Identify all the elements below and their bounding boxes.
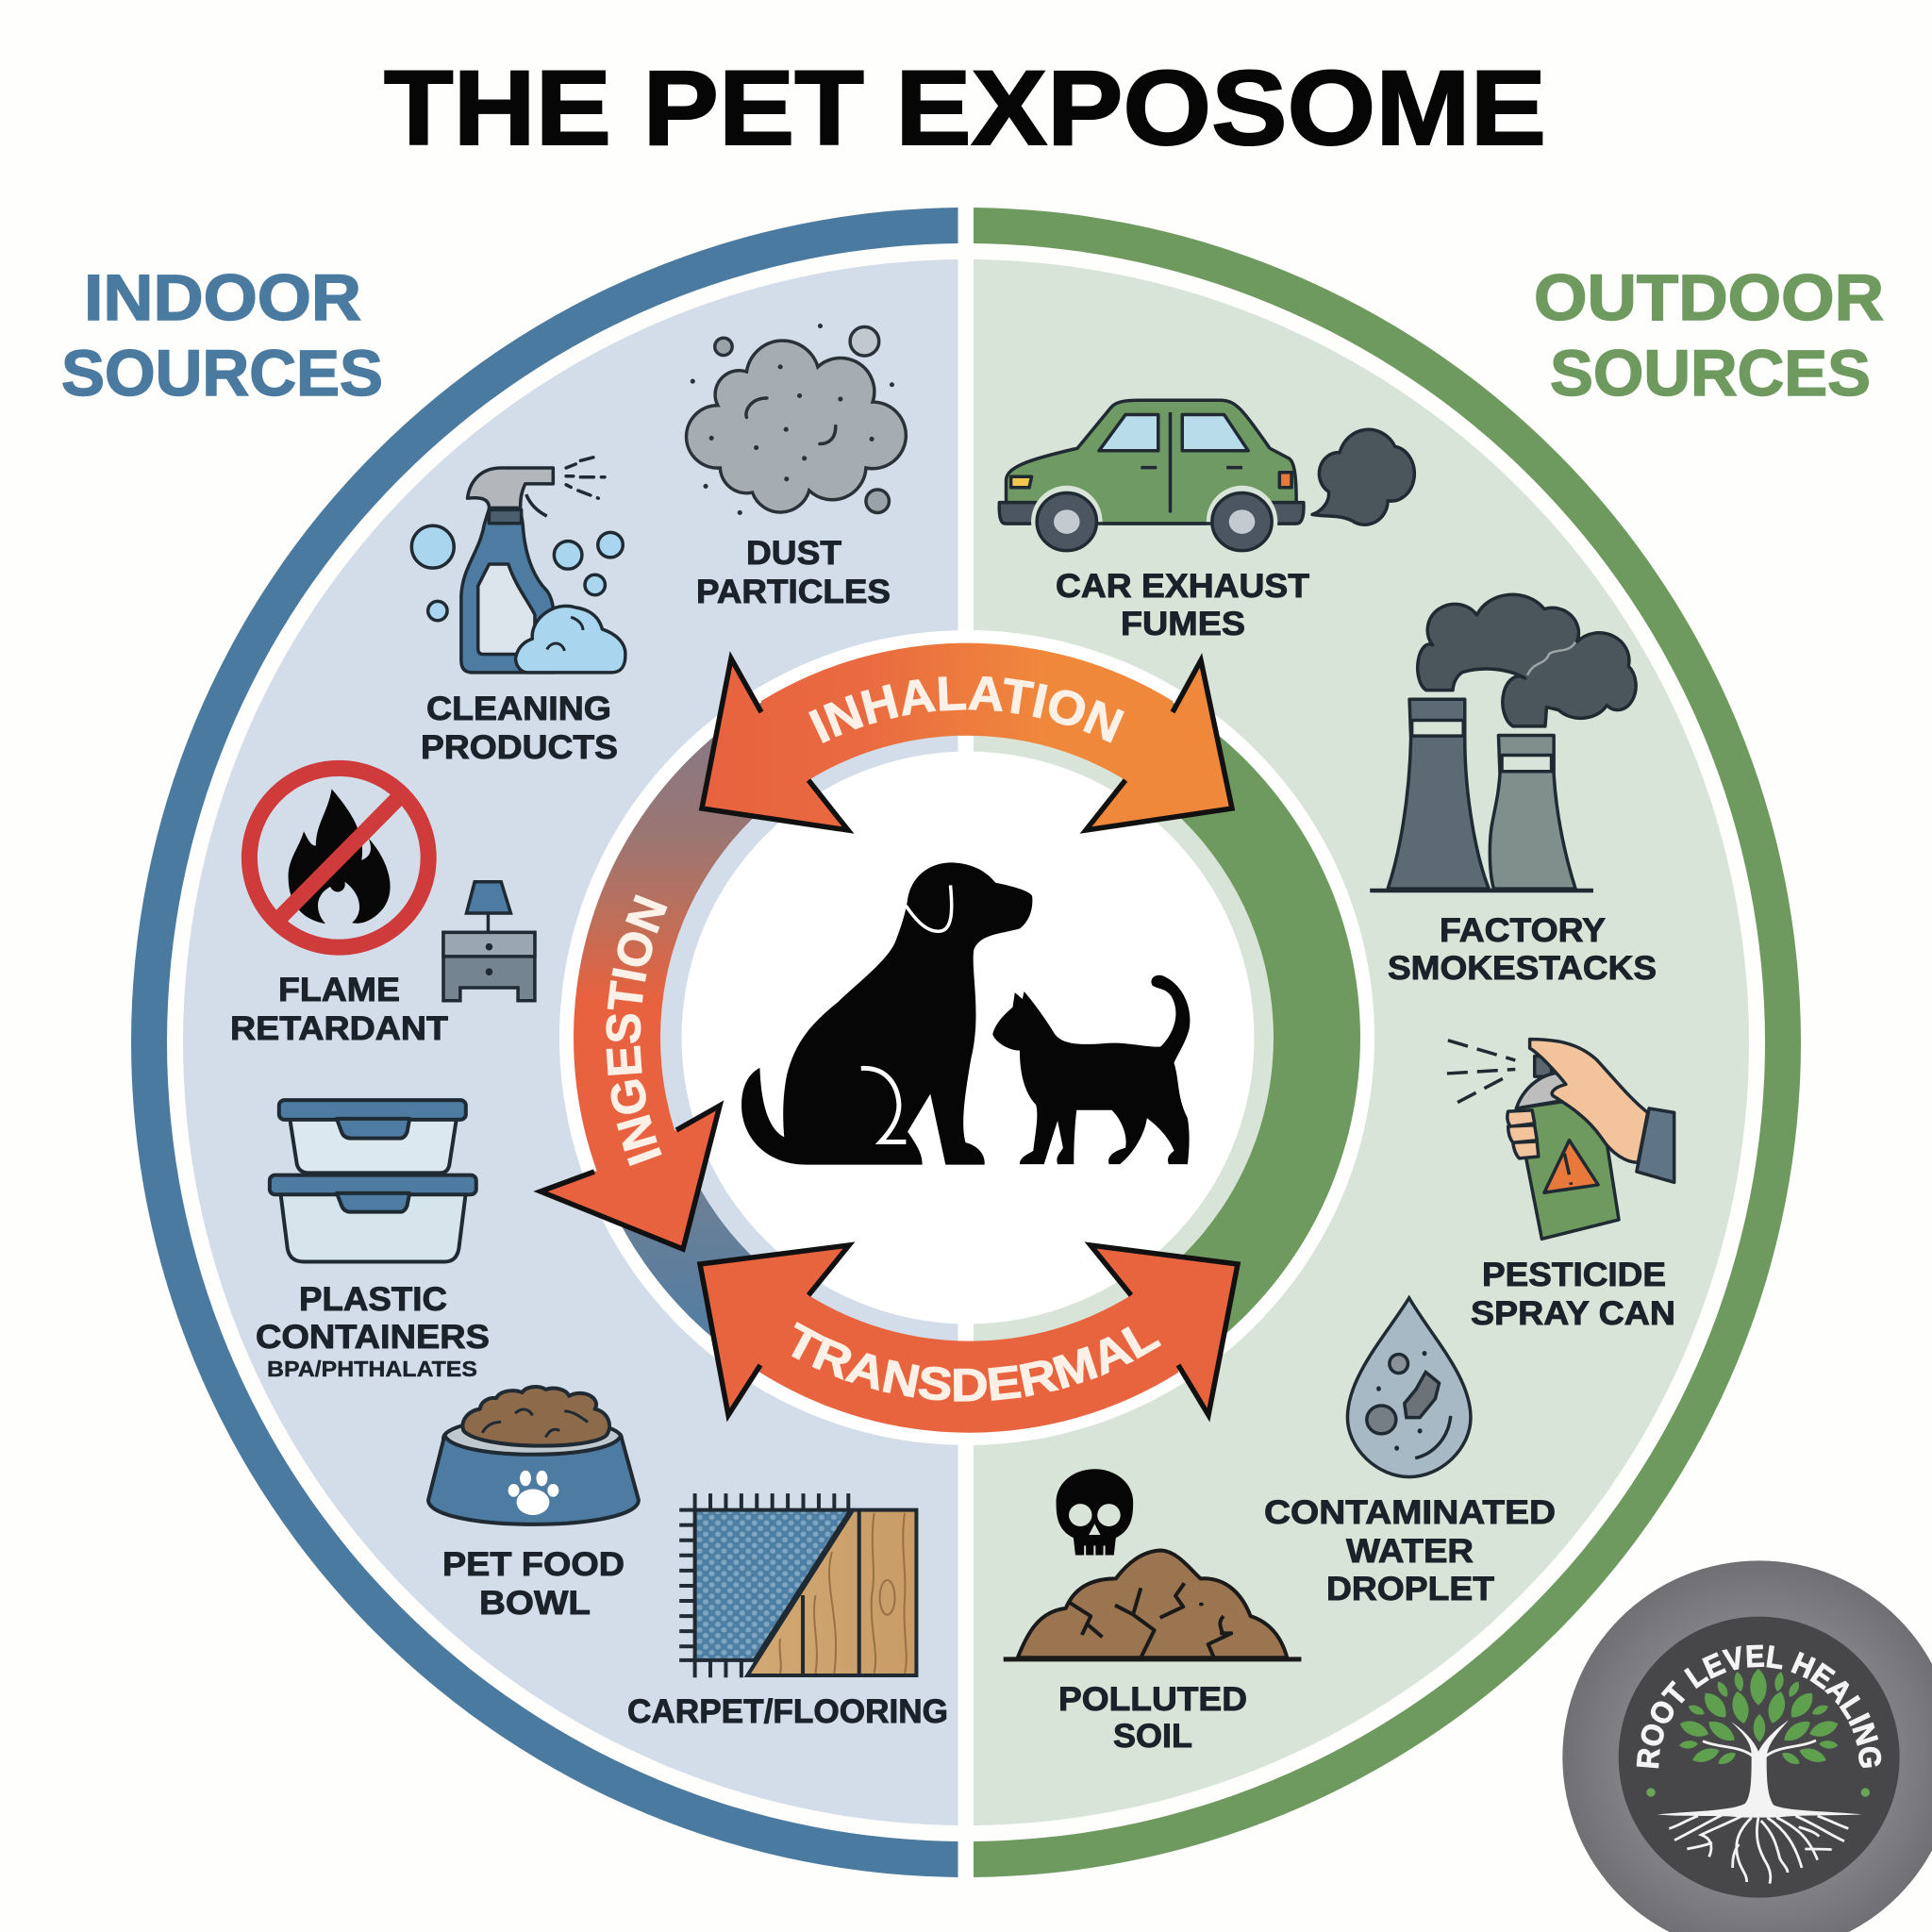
outdoor icons upper group [999,400,1674,1239]
central exposure ring [559,630,1374,1445]
label: plastic containers: CONTAINERS [256,1319,490,1356]
icon: nightstand with lamp [443,882,535,1001]
icon: car with exhaust [999,400,1414,558]
icon: flame retardant prohibition sign [249,768,428,947]
arrow: ingestion [541,1106,720,1249]
icon: polluted soil mound [1004,1551,1301,1659]
arrow: transdermal [700,1245,1238,1433]
label: plastic containers [256,1281,490,1381]
label: contaminated water droplet: CONTAMINATED [1264,1494,1556,1531]
label: pesticide spray can [1471,1257,1675,1332]
arrow: inhalation [702,643,1232,830]
label: pesticide spray can: PESTICIDE [1482,1257,1666,1293]
central pets group [741,862,1190,1165]
icon: skull [1057,1469,1133,1556]
label: pet food bowl [442,1546,625,1622]
label: carpet flooring: CARPET/FLOORING [627,1693,948,1730]
label: pet food bowl: BOWL [479,1585,591,1622]
indoor icons upper group [249,324,906,1001]
arrow labels [606,676,1161,1402]
label: contaminated water droplet: DROPLET [1326,1571,1494,1607]
icon: contaminated water droplet [1347,1298,1471,1477]
label: car exhaust fumes [1056,568,1309,642]
panel: outdoor half circle [974,208,1801,1877]
label: plastic containers: PLASTIC [299,1281,447,1318]
label: cleaning products: PRODUCTS [421,729,618,766]
label: car exhaust fumes: CAR EXHAUST [1056,568,1309,605]
arrow labels: INGESTION [606,894,668,1166]
logo badge: root level healing [1562,1560,1932,1932]
label: car exhaust fumes: FUMES [1121,606,1245,642]
label: factory smokestacks [1388,912,1657,987]
panel: indoor half circle [131,208,958,1877]
heading: outdoor sources: SOURCES [1550,337,1871,409]
logo curved text: ROOT LEVEL HEALING [1636,1645,1881,1768]
icon: carpet and wood flooring [679,1493,916,1677]
title: THE PET EXPOSOME [384,49,1546,167]
icon: plastic containers [270,1100,476,1261]
icon: cat silhouette [992,975,1190,1164]
outdoor icons lower group [1004,1298,1471,1659]
logo tree and roots [1657,1720,1861,1884]
heading: outdoor sources [1534,261,1884,409]
label: contaminated water droplet: WATER [1346,1533,1474,1570]
heading: indoor sources: SOURCES [61,337,383,409]
heading: indoor sources [61,261,383,409]
icon: dog silhouette [741,862,1032,1165]
heading: indoor sources: INDOOR [84,261,361,334]
label: dust particles: DUST [746,535,841,572]
icon: pet food bowl [428,1387,639,1524]
label: polluted soil: SOIL [1113,1718,1192,1755]
label: cleaning products: CLEANING [426,691,611,727]
arrow labels: INHALATION [808,676,1124,743]
heading: outdoor sources: OUTDOOR [1534,261,1884,334]
icon: cleaning spray bottle [411,456,625,673]
label: contaminated water droplet [1264,1494,1556,1607]
label: pesticide spray can: SPRAY CAN [1471,1295,1675,1332]
label: cleaning products [421,691,618,766]
label: flame retardant: FLAME [278,972,400,1008]
label: dust particles: PARTICLES [696,574,891,610]
outdoor labels [1056,568,1675,1755]
icon: dust cloud [687,324,906,515]
label: plastic containers: BPA/PHTHALATES [267,1357,477,1381]
label: pet food bowl: PET FOOD [442,1546,625,1583]
label: dust particles [696,535,891,610]
logo dots [1646,1788,1870,1797]
label: flame retardant: RETARDANT [230,1010,448,1047]
logo leaves [1678,1669,1840,1767]
label: polluted soil [1058,1681,1247,1755]
label: factory smokestacks: FACTORY [1440,912,1606,949]
label: flame retardant [230,972,448,1047]
label: polluted soil: POLLUTED [1058,1681,1247,1718]
label: factory smokestacks: SMOKESTACKS [1388,950,1657,987]
icon: factory smokestacks [1370,594,1636,891]
arrow labels: TRANSDERMAL [791,1322,1161,1402]
icon: pesticide spray can and hand [1447,1040,1674,1239]
indoor icons lower group [270,1100,916,1677]
indoor labels upper [230,535,948,1730]
